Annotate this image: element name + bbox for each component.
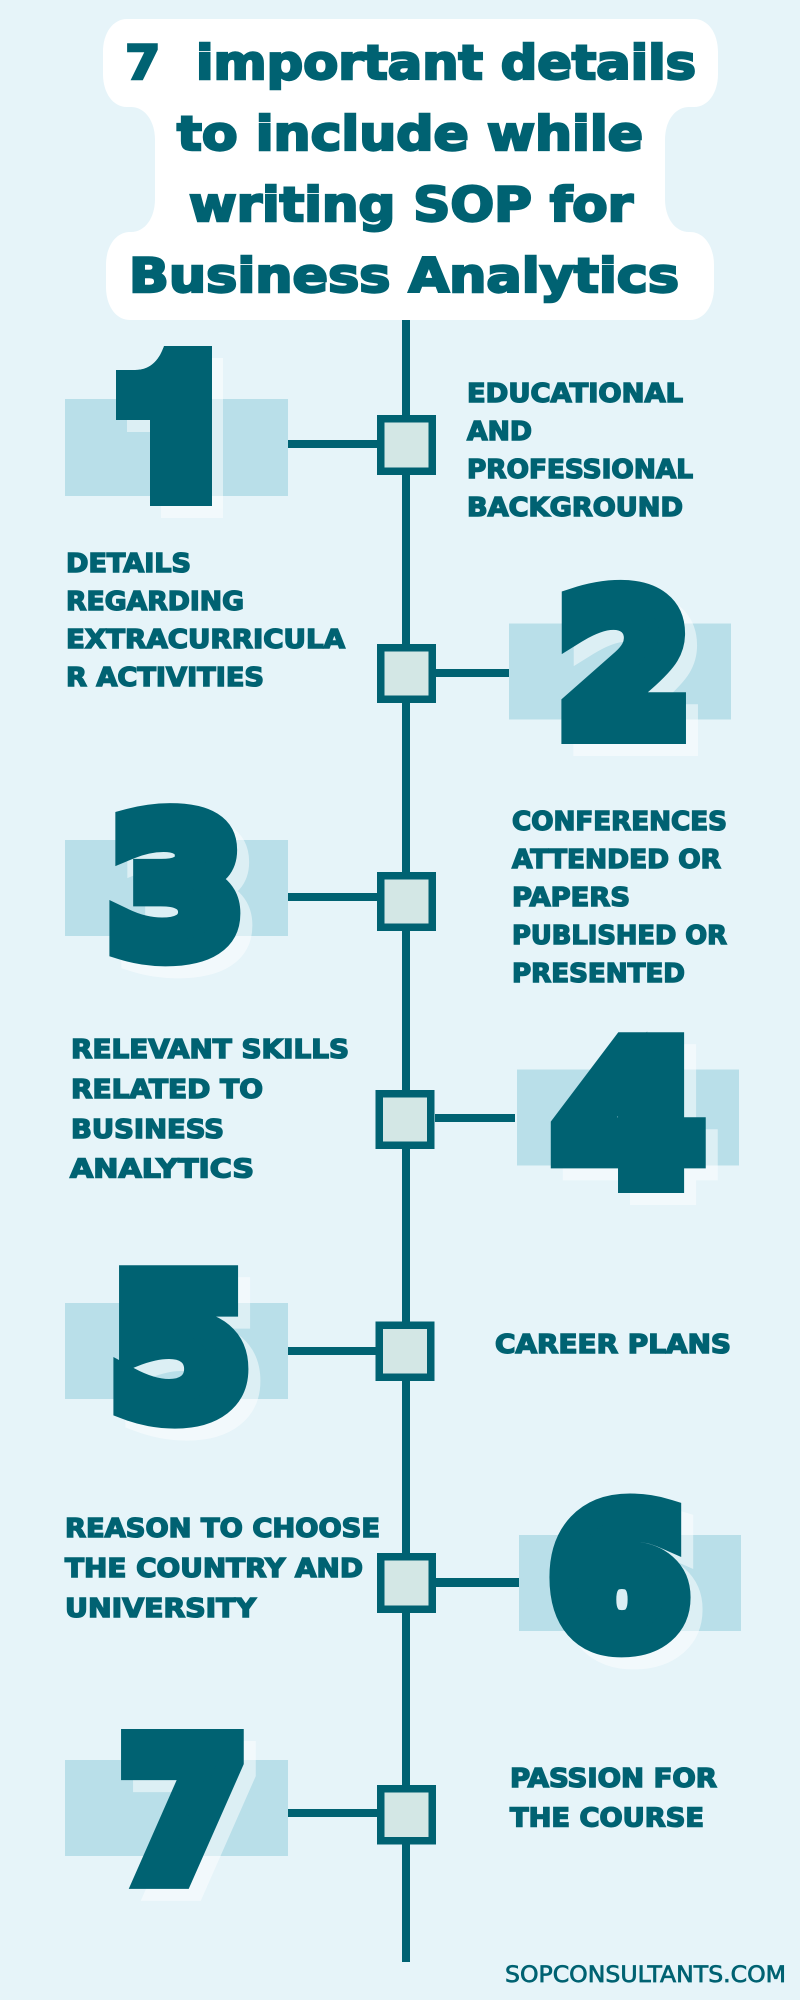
item 5 [65,1241,731,1469]
label 7: THE COURSE [510,1804,704,1834]
number 6: 6 [563,1484,699,1697]
label 3 [512,807,727,989]
number 4: 4 [556,1009,701,1224]
label 4: ANALYTICS [70,1154,254,1184]
label 7: PASSION FOR [510,1764,717,1794]
label 3: CONFERENCES [512,807,727,837]
number 5: 5 [124,1253,260,1469]
timeline vertical line [402,320,410,1962]
item 6 [65,1472,741,1697]
title banner: writing SOP for [189,178,634,233]
label 1 [467,379,693,523]
number 1 [116,346,223,518]
label 4: RELATED TO [71,1075,263,1105]
label 4 [70,1035,349,1184]
number 2: 2 [560,558,689,775]
number 1: 1 [104,305,264,550]
number 3: 3 [122,794,254,1006]
item 2 [66,549,731,787]
label 3: PAPERS [512,883,630,913]
title banner: 7 important details [125,36,696,91]
label 7 [510,1764,717,1834]
title banner [103,19,718,320]
number 7: 7 [134,1717,257,1932]
label 3: ATTENDED OR [512,845,721,875]
number 2: 2 [572,570,701,787]
item 4 [70,1009,739,1236]
label 2: DETAILS [66,549,191,579]
label 6: UNIVERSITY [65,1594,257,1624]
label 3: PRESENTED [512,959,685,989]
label 2: REGARDING [66,587,244,617]
number 7: 7 [122,1705,245,1920]
label 2: EXTRACURRICULA [66,625,345,655]
label 3: PUBLISHED OR [512,921,727,951]
title banner: to include while [177,107,643,162]
number 1: 1 [115,317,275,562]
label 4: RELEVANT SKILLS [71,1035,349,1065]
label 2: R ACTIVITIES [66,663,264,693]
label 6: REASON TO CHOOSE [65,1514,380,1544]
label 1: PROFESSIONAL [467,455,693,485]
label 6 [65,1514,380,1624]
item 3 [65,782,727,1006]
item 7 [65,1705,717,1932]
number 6: 6 [551,1472,687,1685]
number 5: 5 [112,1241,248,1457]
label 2 [66,549,345,693]
label 4: BUSINESS [71,1115,224,1145]
title banner: Business Analytics [129,249,679,304]
number 3: 3 [110,782,242,994]
label 5: CAREER PLANS [495,1330,731,1360]
footer website: SOPCONSULTANTS.COM [505,1963,786,1988]
label 1: BACKGROUND [467,493,683,523]
number 4: 4 [568,1021,713,1236]
item 1 [65,346,694,518]
label 6: THE COUNTRY AND [65,1554,363,1584]
label 1: EDUCATIONAL [467,379,683,409]
label 1: AND [467,417,532,447]
